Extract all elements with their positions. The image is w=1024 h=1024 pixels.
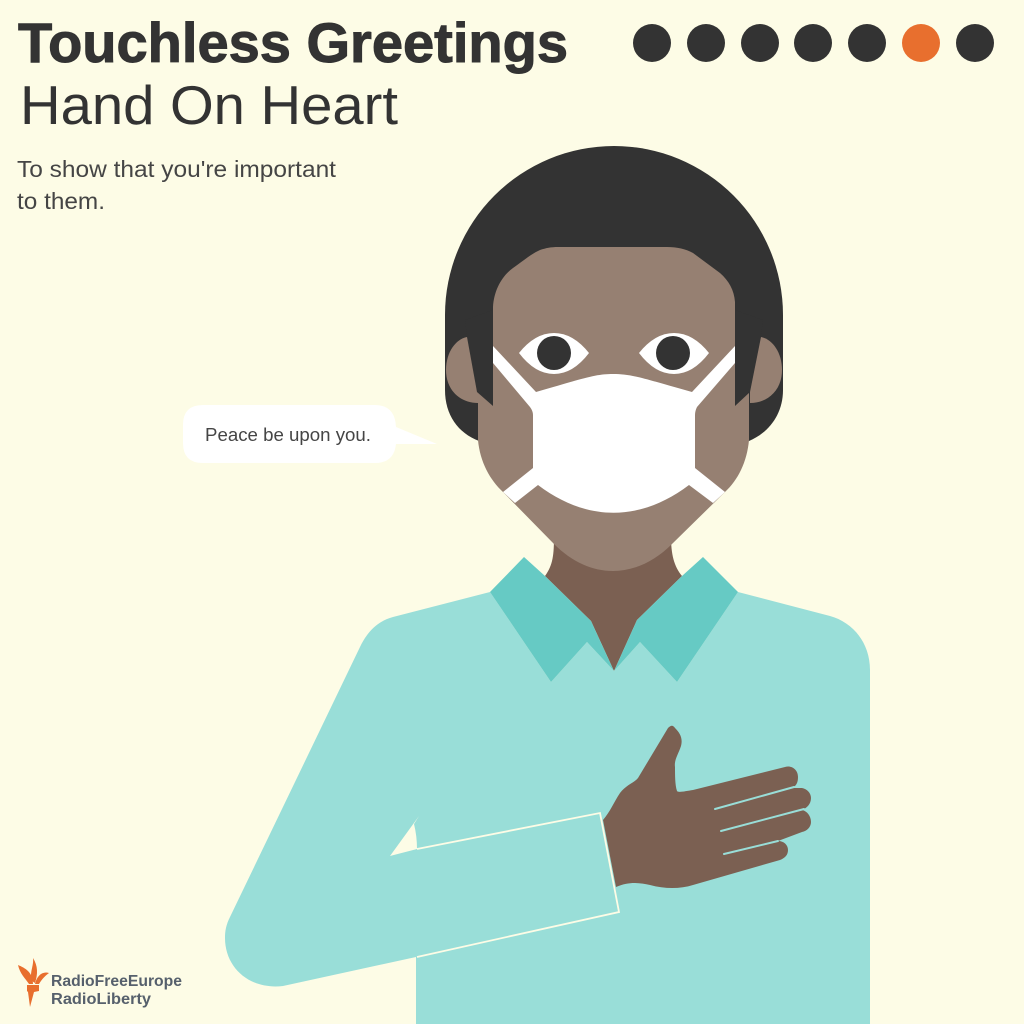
hair: [445, 146, 783, 460]
sideburns: [465, 310, 763, 406]
speech bubble: [183, 405, 437, 463]
collar: [490, 557, 738, 682]
ears: [446, 337, 782, 403]
sleeve outline: [417, 813, 619, 957]
description text: [17, 156, 337, 214]
logo wordmark: RadioFreeEurope: [51, 973, 182, 990]
subtitle: Hand On Heart: Hand On Heart: [20, 74, 398, 136]
icon: torch flame: [18, 958, 49, 1007]
face mask: [493, 346, 735, 513]
progress dots: [633, 24, 994, 62]
face: [478, 247, 749, 571]
person illustration: [225, 146, 870, 1024]
hand: [603, 726, 811, 888]
title: Touchless Greetings: Touchless Greetings: [18, 11, 568, 74]
description text: to them.: [17, 188, 105, 214]
neck: [545, 535, 682, 671]
arm gap: [390, 816, 419, 856]
eyes: [519, 333, 709, 374]
description text: To show that you're important: [17, 156, 337, 182]
logo wordmark: [51, 973, 182, 1008]
logo: RadioFreeEurope RadioLiberty: [18, 958, 182, 1008]
logo wordmark: RadioLiberty: [51, 991, 151, 1008]
shirt: [225, 592, 870, 1024]
speech bubble: Peace be upon you.: [205, 425, 371, 445]
finger separators: [715, 787, 804, 854]
